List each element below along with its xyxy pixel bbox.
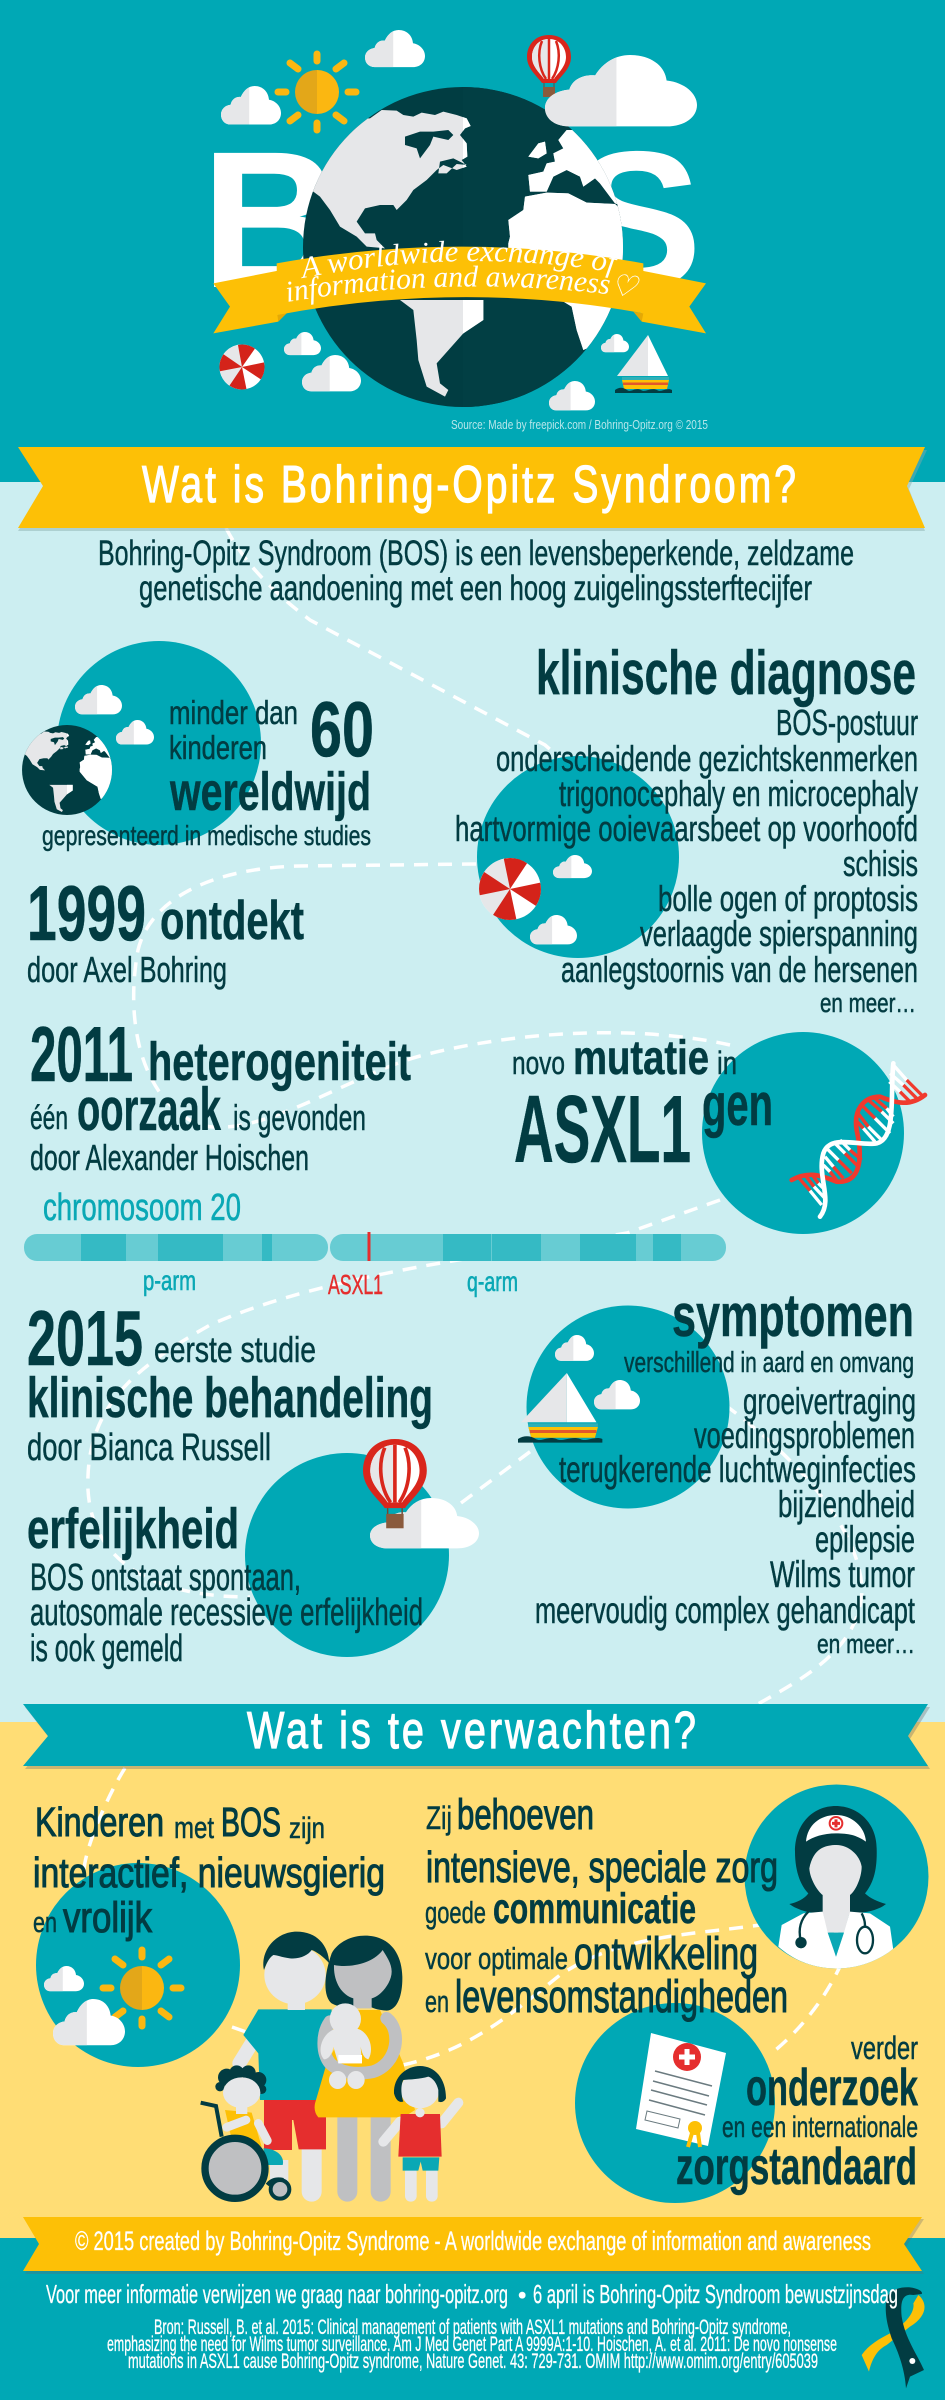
panel: sixty children worldwide <box>21 641 374 851</box>
text block: 1999 discovered <box>27 869 304 990</box>
clouds <box>221 30 697 410</box>
text block: children are interactive: en <box>33 1907 57 1939</box>
slogan text: information and awareness♡ <box>286 266 640 305</box>
symptoms list: en meer… <box>817 1629 915 1659</box>
icon: awareness ribbon <box>862 2287 925 2388</box>
girl <box>383 2066 458 2202</box>
panel: sunny circle <box>36 1863 240 2067</box>
logo letters BOS: S <box>572 111 702 329</box>
footer information line: Voor meer informatie verwijzen we graag naar bohring-opitz.org <box>46 2279 508 2309</box>
p-arm bar <box>24 1234 328 1261</box>
text block: 2011 heterogeneity: één <box>30 1099 68 1136</box>
text block: 1999 discovered: door Axel Bohring <box>27 949 227 990</box>
heredity text: is ook gemeld <box>30 1628 183 1670</box>
text block: children are interactive: BOS <box>221 1799 281 1845</box>
footer information line: • <box>518 2282 526 2309</box>
circle with DNA helix <box>702 1032 925 1234</box>
references <box>107 2316 837 2373</box>
slogan text <box>286 240 640 305</box>
image source credit: Source: Made by freepick.com / Bohring-Opitz.org © 2015 <box>451 417 708 432</box>
text block: they need intensive care: voor optimale <box>425 1941 568 1976</box>
ASXL1 marker <box>368 1232 370 1261</box>
chromosome label: chromosoom 20 <box>43 1187 241 1229</box>
statistic text <box>42 685 374 851</box>
text block: 2015 first study: eerste studie <box>154 1329 316 1370</box>
circle with clouds and globe <box>21 641 261 845</box>
text block: children are interactive: interactief, nieuwsgierig <box>33 1849 385 1896</box>
text block: they need intensive care: goede <box>425 1895 486 1930</box>
statistic text: 60 <box>310 685 374 773</box>
mutation text: in <box>717 1045 737 1081</box>
text block: they need intensive care <box>425 1791 788 2022</box>
circle with balloon and cloud <box>245 1439 479 1657</box>
text block: 1999 discovered: ontdekt <box>160 889 304 951</box>
text block: 2015 first study: 2015 <box>27 1294 143 1382</box>
text block: they need intensive care: communicatie <box>493 1885 696 1933</box>
diagnosis list <box>455 702 918 1018</box>
mutation text: ASXL1 <box>514 1076 691 1183</box>
text block: further research: verder <box>851 2030 918 2066</box>
chromosome labels: p-arm <box>143 1265 196 1296</box>
statistic text: wereldwijd <box>169 762 371 822</box>
woman <box>315 1936 415 2202</box>
icon: sailboat <box>615 335 672 393</box>
icon: hot air balloon <box>527 35 571 97</box>
connecting dashed route <box>84 528 862 2065</box>
slogan text: A worldwide exchange of <box>301 240 618 278</box>
heredity text: erfelijkheid <box>27 1497 239 1561</box>
text block: they need intensive care: behoeven <box>457 1791 594 1839</box>
intro text <box>98 534 854 608</box>
text block: they need intensive care: ontwikkeling <box>574 1928 758 1979</box>
man <box>239 1932 332 2202</box>
logo letters BOS <box>201 111 702 329</box>
illustration: family <box>201 1932 458 2202</box>
ribbon heading: Wat is te verwachten <box>23 1702 930 1769</box>
ribbon banner with slogan <box>213 240 706 334</box>
text block: 2011 heterogeneity <box>30 1010 411 1178</box>
text block: 2011 heterogeneity: 2011 <box>30 1010 133 1098</box>
symptoms list <box>535 1347 916 1659</box>
text block: they need intensive care: intensieve, speciale zorg <box>426 1843 778 1892</box>
boy in wheelchair <box>201 2065 289 2199</box>
footer ribbon <box>23 2217 924 2274</box>
mutation text: mutatie <box>573 1032 709 1085</box>
icon: sun <box>278 54 356 130</box>
diagnosis list: en meer… <box>820 988 916 1018</box>
heredity text <box>27 1497 423 1670</box>
panel: nurse circle <box>744 1784 928 1969</box>
chromosome labels: ASXL1 <box>328 1269 383 1300</box>
icon: beach ball <box>220 344 264 390</box>
chromosome labels <box>143 1265 518 1300</box>
text block: children are interactive: met <box>174 1810 214 1845</box>
text block: children are interactive: vrolijk <box>63 1894 152 1942</box>
text block: children are interactive: Kinderen <box>35 1799 164 1845</box>
mutation text <box>512 1032 773 1183</box>
panel: clinical diagnosis <box>455 639 918 1018</box>
text block: 2015 first study <box>27 1294 433 1469</box>
statistic text: gepresenteerd in medische studies <box>42 820 371 851</box>
q-arm bar <box>330 1234 726 1261</box>
panel: symptoms <box>518 1282 916 1659</box>
text block: 2015 first study: door Bianca Russell <box>27 1427 271 1469</box>
text block: they need intensive care: levensomstandigheden <box>455 1971 788 2022</box>
ribbon heading: Wat is te verwachten: Wat is te verwachten? <box>247 1702 699 1760</box>
statistic text: minder dan <box>169 694 298 731</box>
mutation text: gen <box>702 1071 773 1138</box>
heredity text: autosomale recessieve erfelijkheid <box>30 1592 423 1634</box>
mutation text: novo <box>512 1045 565 1081</box>
text block: children are interactive <box>33 1799 385 1942</box>
ribbon heading: Wat is Bohring-Opitz Syndroom <box>18 447 927 531</box>
logo letters BOS: B <box>201 111 342 329</box>
text block: 2015 first study: klinische behandeling <box>27 1366 433 1430</box>
text block: 2011 heterogeneity: heterogeniteit <box>148 1032 411 1092</box>
circle with beach ball and clouds <box>477 756 679 958</box>
chromosome labels: q-arm <box>467 1266 518 1297</box>
circle with boat and clouds <box>518 1306 730 1508</box>
text block: 1999 discovered: 1999 <box>27 869 146 957</box>
baby <box>321 2003 396 2089</box>
text block: 2011 heterogeneity: door Alexander Hoischen <box>30 1137 309 1178</box>
text block: further research <box>676 2030 918 2196</box>
panel: heredity <box>27 1439 479 1670</box>
icon: nurse <box>778 1806 893 1969</box>
chart: chromosome 20 <box>24 1187 726 1300</box>
icon: medical document <box>636 2033 726 2147</box>
text block: children are interactive: zijn <box>289 1812 325 1845</box>
text block: they need intensive care: en <box>425 1984 449 2019</box>
panel: document circle <box>575 2003 775 2203</box>
icon: globe <box>303 87 623 407</box>
logo: BOS globe <box>201 30 708 432</box>
panel: ASXL1 mutation <box>512 1032 925 1234</box>
text block: 2011 heterogeneity: oorzaak <box>77 1076 221 1143</box>
heredity text: BOS ontstaat spontaan, <box>30 1557 301 1599</box>
text block: they need intensive care: Zij <box>426 1800 452 1836</box>
text block: 2011 heterogeneity: is gevonden <box>233 1097 366 1138</box>
statistic text: kinderen <box>169 729 267 766</box>
